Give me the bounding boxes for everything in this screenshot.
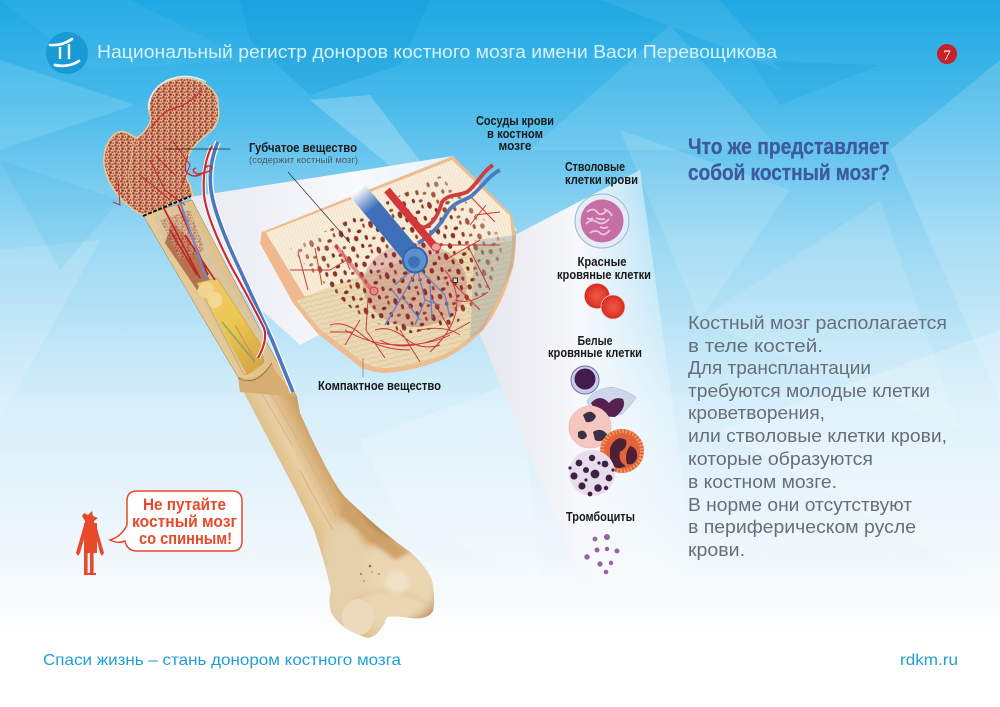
footer slogan: Спаси жизнь – стань донором костного мозга xyxy=(43,652,401,669)
label pointer: spongy bone xyxy=(165,148,230,150)
bone cross-section detail xyxy=(260,156,516,373)
femur bone xyxy=(104,76,450,650)
red vessel xyxy=(387,190,440,251)
cells column xyxy=(548,160,651,574)
label: vessels: в костном xyxy=(487,127,543,141)
label: spongy substance xyxy=(249,141,358,165)
lymphocyte xyxy=(571,366,599,394)
label: vessels: мозге xyxy=(498,139,532,153)
body text: в костном мозге. xyxy=(688,472,837,492)
stem cell xyxy=(575,194,629,248)
trochanter seam xyxy=(128,138,135,205)
page number: 7 xyxy=(943,48,951,64)
heading: собой костный мозг? xyxy=(688,160,890,185)
outer vessels xyxy=(185,142,293,392)
speech bubble callout: со спинным! xyxy=(139,529,232,548)
body text: В норме они отсутствуют xyxy=(688,495,912,515)
label: spongy substance: (содержит костный мозг) xyxy=(249,155,358,165)
granulocyte orange xyxy=(600,429,644,473)
condyle pores xyxy=(360,565,380,582)
footer url: rdkm.ru xyxy=(900,652,958,669)
label: stem cells xyxy=(565,160,638,187)
label: platelets: Тромбоциты xyxy=(566,510,635,524)
label: white cells xyxy=(548,334,642,360)
panel: zoom fan to detail xyxy=(190,156,517,345)
head cartilage highlight xyxy=(149,76,206,110)
cavity xyxy=(153,150,268,375)
body text: в периферическом русле xyxy=(688,517,916,537)
lower shaft and condyles xyxy=(244,392,434,638)
marrow spots xyxy=(290,176,505,335)
label: vessels: Сосуды крови xyxy=(476,114,554,128)
shaft vessel lines xyxy=(257,380,336,530)
label: red cells: Красные xyxy=(578,255,627,269)
red network xyxy=(290,196,500,362)
label: red cells xyxy=(557,255,651,282)
label: stem cells: Стволовые xyxy=(565,160,625,174)
platelets xyxy=(584,534,620,574)
label: white cells: кровяные клетки xyxy=(548,346,642,360)
compact substance xyxy=(298,240,512,368)
cut line xyxy=(143,196,191,216)
upper shaft wall xyxy=(143,200,297,397)
heading xyxy=(688,134,890,185)
cut shaft rim xyxy=(238,363,272,381)
body text: крови. xyxy=(688,540,745,560)
speech bubble callout: Не путайте xyxy=(143,495,226,514)
eosinophil pale xyxy=(569,406,611,448)
body text: кроветворения, xyxy=(688,403,825,423)
character icon xyxy=(76,511,104,575)
wavy blue vessel xyxy=(418,170,500,243)
body text: которые образуются xyxy=(688,449,873,469)
marker square xyxy=(453,278,458,282)
reddish marrow core xyxy=(363,243,467,327)
cut shaft end xyxy=(238,363,297,397)
header title: Национальный регистр доноров костного мозга имени Васи Перевощикова xyxy=(97,41,778,62)
small vessel end xyxy=(335,245,378,295)
left cut face xyxy=(260,232,305,303)
section surface xyxy=(264,160,512,368)
label: spongy substance: Губчатое вещество xyxy=(249,141,357,155)
right shadow wedge xyxy=(470,235,516,338)
body text: в теле костей. xyxy=(688,336,823,356)
label: red cells: кровяные клетки xyxy=(557,268,651,282)
spongy head xyxy=(104,78,219,215)
label pointer: compact xyxy=(362,358,364,377)
header logo xyxy=(46,32,88,74)
label: compact substance: Компактное вещество xyxy=(318,379,441,393)
section base xyxy=(260,156,516,373)
heading: Что же представляет xyxy=(688,134,889,159)
label pointer: spongy detail xyxy=(288,172,350,243)
speech bubble callout: костный мозг xyxy=(132,512,237,531)
body text: требуются молодые клетки xyxy=(688,381,930,401)
wavy red vessel xyxy=(422,165,493,228)
body text: Костный мозг располагается xyxy=(688,313,947,333)
red blood cells xyxy=(584,284,625,319)
white blood cells xyxy=(568,366,644,496)
label: white cells: Белые xyxy=(578,334,613,348)
monocyte xyxy=(587,387,636,417)
body text xyxy=(688,313,947,560)
page number xyxy=(937,44,957,64)
blue branches xyxy=(385,270,450,325)
speech bubble callout xyxy=(110,491,242,551)
body text: или стволовые клетки крови, xyxy=(688,426,947,446)
body text: Для трансплантации xyxy=(688,358,871,378)
panel: zoom fan to cells xyxy=(480,170,700,600)
head veins xyxy=(113,90,202,205)
basophil xyxy=(568,450,615,496)
blue vessel xyxy=(357,190,427,272)
label: stem cells: клетки крови xyxy=(565,173,638,187)
